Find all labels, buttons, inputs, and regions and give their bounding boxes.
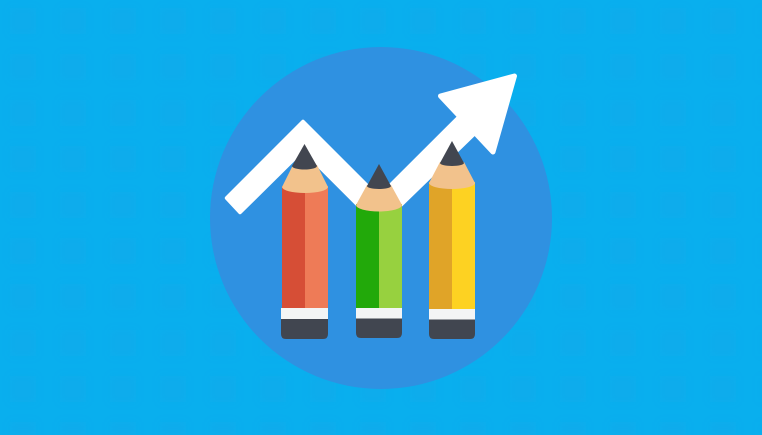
blue circle [210, 47, 552, 389]
icon: zigzag trend arrow [227, 76, 515, 226]
pencil: green [356, 164, 402, 338]
pencil: red [281, 144, 328, 339]
pencil: yellow [429, 141, 475, 339]
